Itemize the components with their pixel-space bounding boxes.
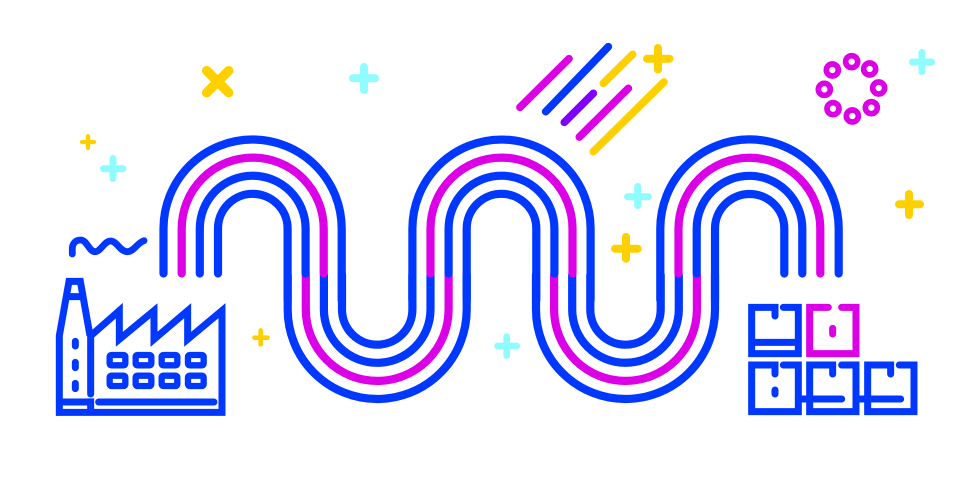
plus: cyan top centre — [353, 67, 375, 90]
upper arch 3 — [660, 139, 839, 300]
plus: cyan bottom centre — [498, 336, 517, 356]
box: top right magenta — [810, 307, 856, 354]
icon: smoke squiggle — [72, 240, 144, 254]
plus: cyan top right — [912, 52, 932, 72]
plus: cyan left — [104, 158, 123, 178]
icon: factory — [56, 281, 222, 416]
box: bottom right — [856, 365, 914, 412]
shooting streak lines — [520, 47, 664, 152]
icon: ring of circles — [818, 56, 885, 122]
plus: small yellow left — [82, 136, 94, 148]
plus: yellow centre right — [615, 237, 638, 259]
lower U bend 2 — [536, 275, 715, 399]
upper arch 1 — [164, 140, 342, 300]
sparkle: yellow cross — [207, 71, 229, 93]
plus: yellow top — [647, 48, 670, 70]
plus: yellow right — [899, 194, 920, 215]
icon: stacked boxes — [752, 307, 914, 412]
upper arch 2 — [412, 140, 591, 300]
plus: cyan centre right — [628, 186, 648, 206]
pipeline: four parallel winding lines — [164, 139, 839, 399]
sparkle: plus marks — [82, 48, 932, 356]
plus: small yellow bottom — [254, 330, 268, 344]
box: bottom left — [752, 365, 798, 412]
lower U bend 1 — [288, 275, 467, 399]
box: bottom middle — [798, 365, 856, 412]
box: top left — [752, 307, 798, 354]
